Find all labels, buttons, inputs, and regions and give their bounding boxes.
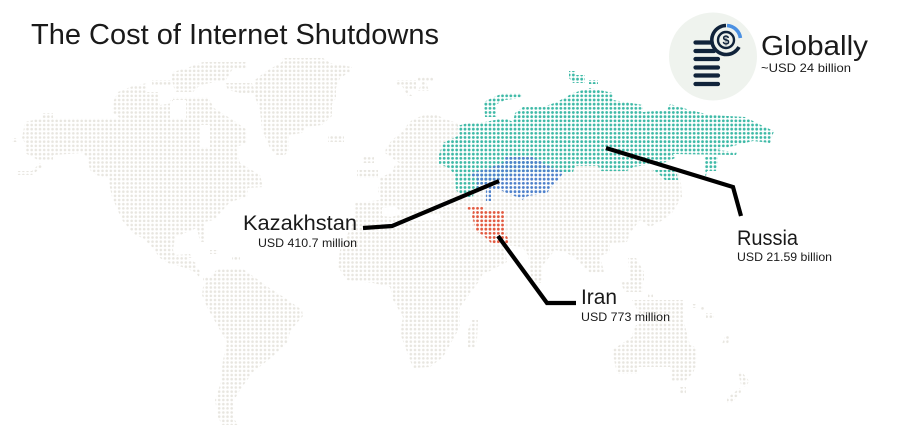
icon: coin stack: $ <box>723 34 730 48</box>
land: Madagascar <box>468 320 478 348</box>
land: Arctic Canada <box>152 62 255 93</box>
world dot map <box>12 58 774 425</box>
land: Australia and Oceania <box>612 300 749 403</box>
land: Central and South America <box>202 250 303 425</box>
land: North America <box>12 83 263 277</box>
region: Iran in red <box>467 206 509 244</box>
global label: Globally <box>761 30 868 61</box>
Russia label <box>737 226 832 264</box>
title: The Cost of Internet Shutdowns <box>31 19 439 51</box>
land: Southeast Asia <box>620 258 653 298</box>
land: Iceland and Svalbard <box>328 77 433 142</box>
Kazakhstan label: USD 410.7 million <box>258 236 357 250</box>
arrow: Kazakhstan leader line <box>363 181 499 228</box>
global label <box>761 30 868 75</box>
arrow: Russia leader line <box>606 148 741 216</box>
Russia label: USD 21.59 billion <box>737 250 832 264</box>
Iran label <box>581 285 670 324</box>
icon: coin stack <box>669 12 757 100</box>
global label: ~USD 24 billion <box>761 61 851 75</box>
land: British Isles <box>357 156 378 178</box>
land: Europe, Asia and Africa <box>338 115 682 368</box>
region: Russia in teal <box>439 71 774 197</box>
Iran label: Iran <box>581 285 617 309</box>
Russia label: Russia <box>737 226 798 250</box>
Kazakhstan label <box>243 211 357 250</box>
arrow: Iran leader line <box>498 236 576 303</box>
region: Kazakhstan in blue <box>472 157 564 201</box>
Iran label: USD 773 million <box>581 310 670 324</box>
Kazakhstan label: Kazakhstan <box>243 211 357 235</box>
land: Greenland <box>253 58 352 155</box>
